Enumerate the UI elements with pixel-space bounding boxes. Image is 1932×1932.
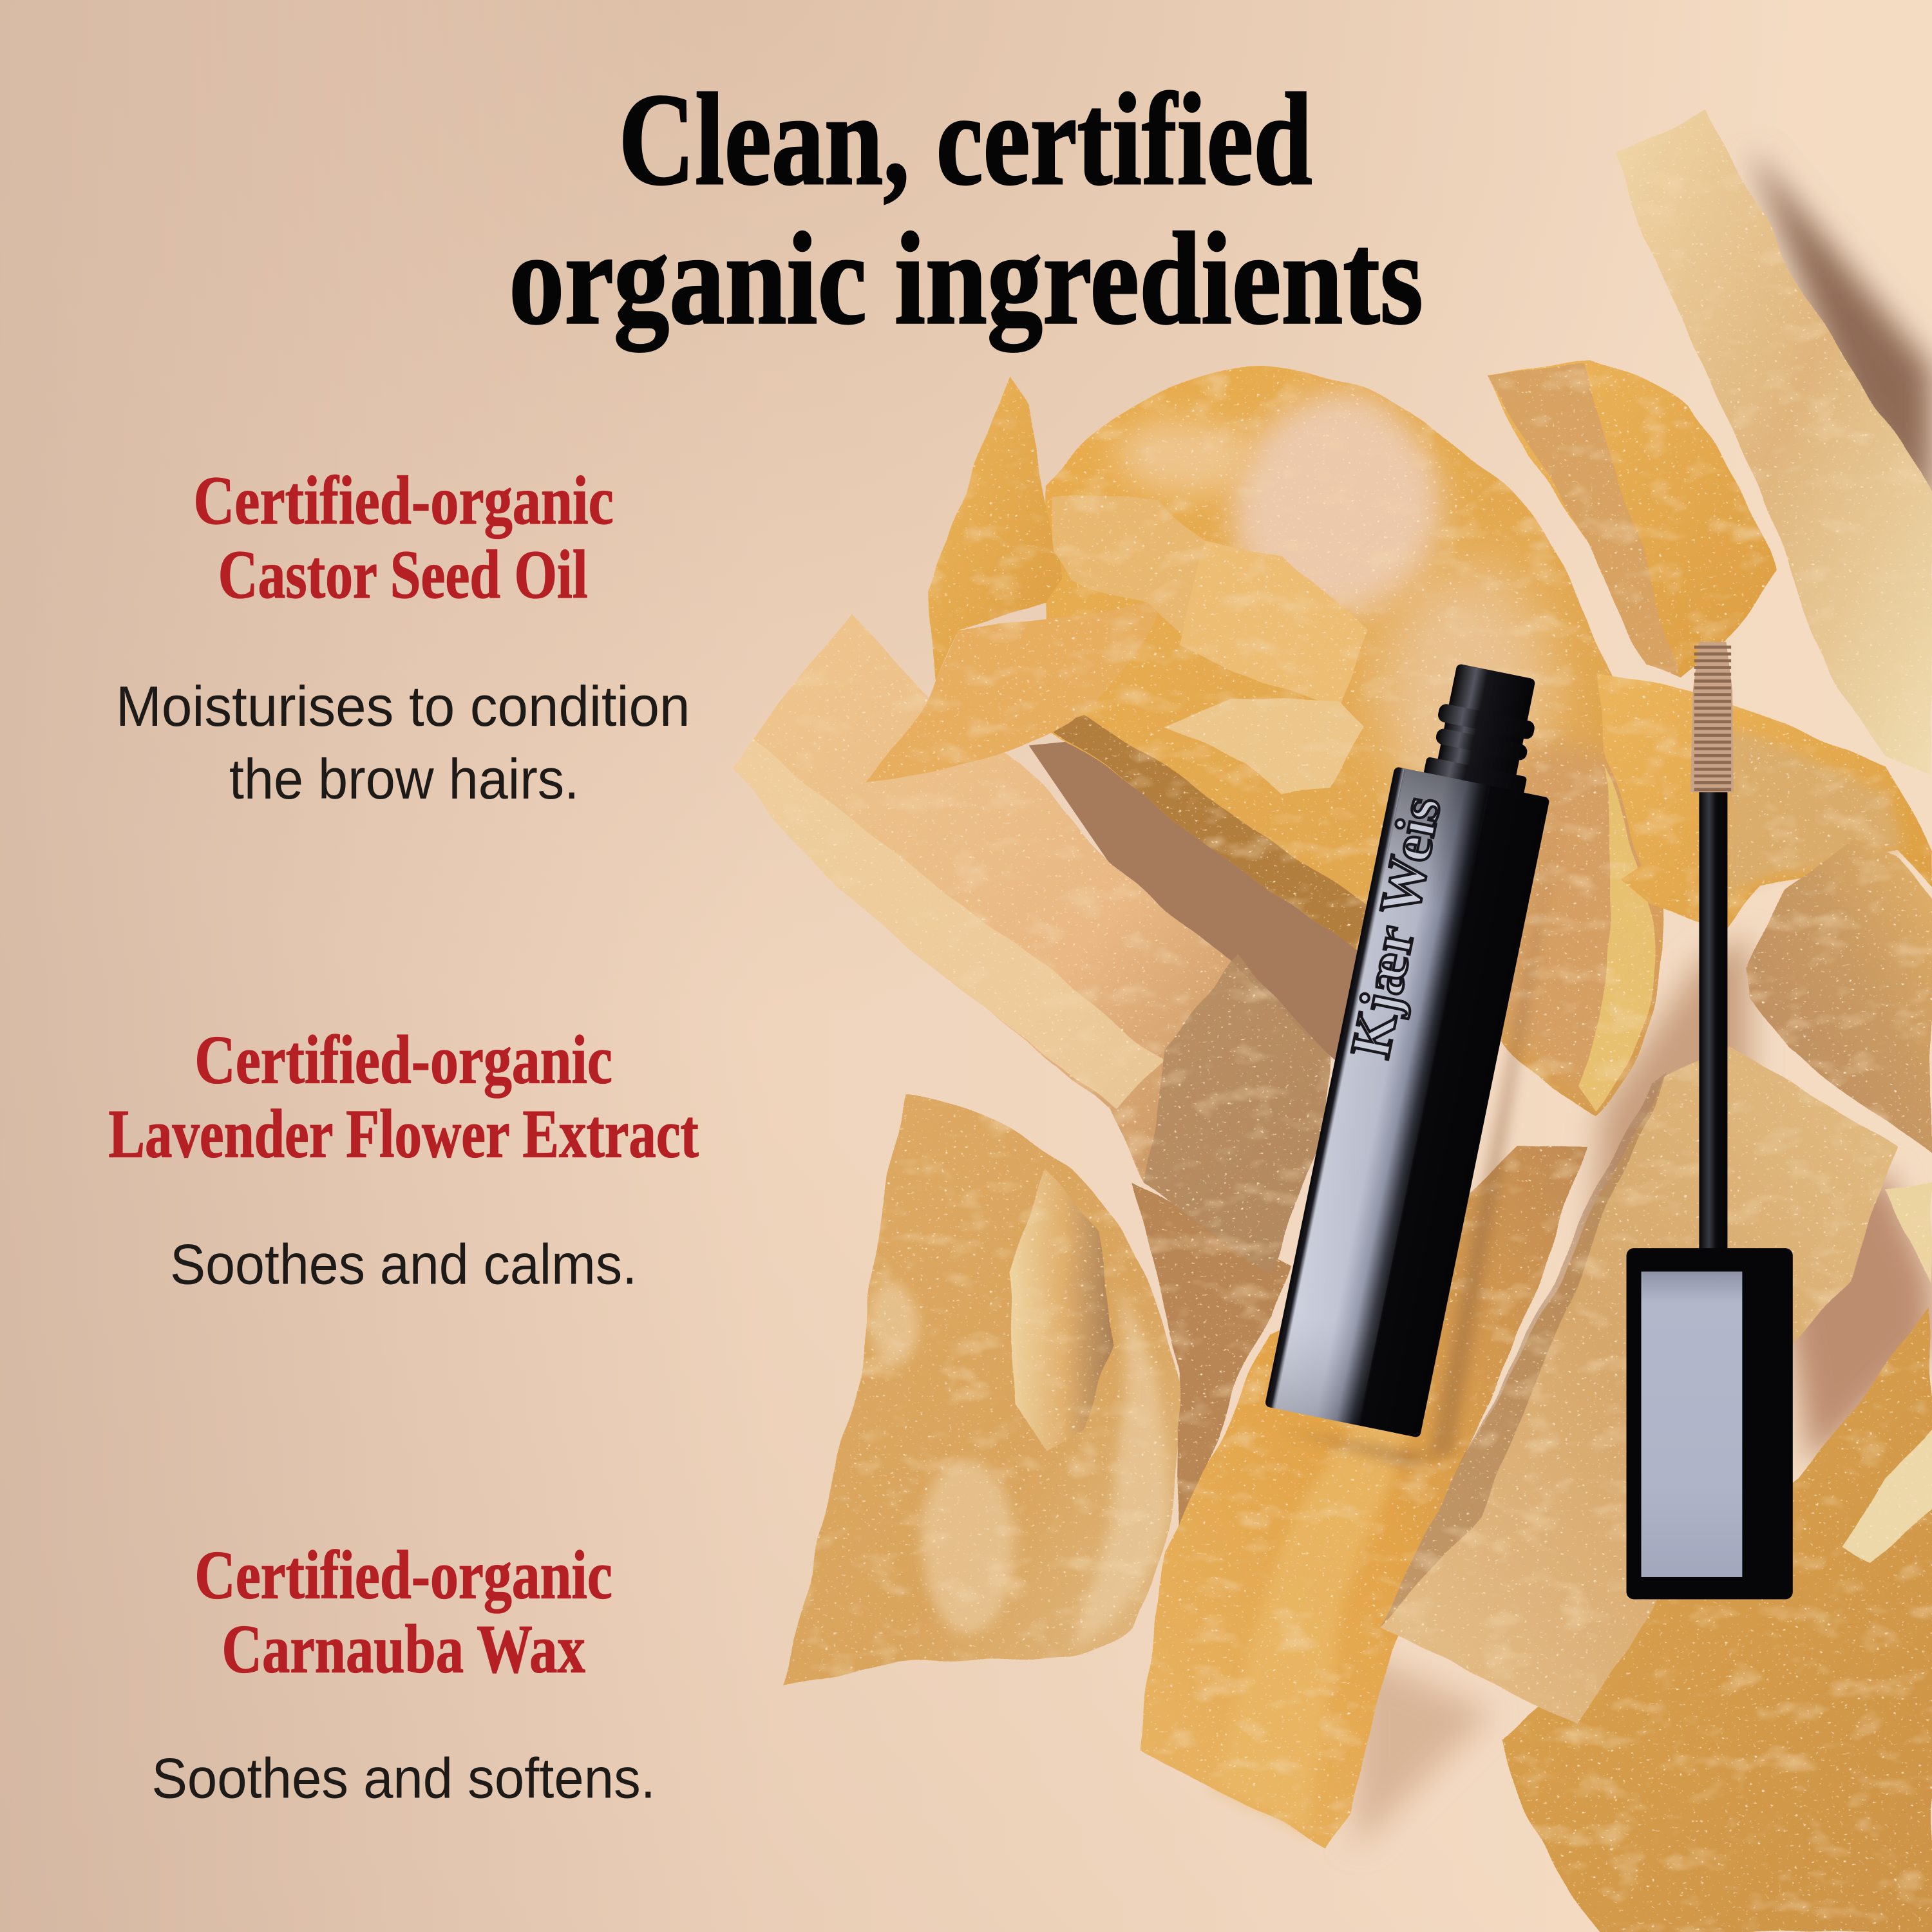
heading	[194, 1538, 612, 1687]
ingredient: castor seed oil	[116, 463, 690, 811]
tube neck	[1423, 661, 1547, 796]
wax: top right pale strip	[1614, 111, 1932, 774]
wax: right slab frost	[1725, 727, 1904, 900]
wax: flake lower	[1164, 696, 1365, 795]
heading: Castor Seed Oil	[218, 537, 588, 613]
wax: strip highlight	[1214, 1356, 1417, 1836]
description	[116, 674, 690, 811]
wax: curved flake	[866, 601, 1158, 782]
wax: disc frost	[869, 1282, 1168, 1651]
wax: strip brown end	[1146, 955, 1331, 1271]
heading: Certified-organic	[194, 1538, 612, 1614]
wax: strip shadow seam	[1378, 1074, 1666, 1627]
shadow: under centre pile	[1029, 739, 1361, 1072]
ingredient: lavender flower extract	[108, 1023, 699, 1296]
brush	[1690, 642, 1734, 792]
heading: Certified-organic	[194, 1023, 612, 1099]
wax: flake upper	[1054, 495, 1205, 641]
wax: small flake on disc	[1008, 1171, 1113, 1452]
wax: brown piece behind tube	[1133, 1183, 1287, 1553]
shadow: bottom centre strip	[1356, 1651, 1491, 1848]
heading: Lavender Flower Extract	[108, 1097, 699, 1173]
description: Soothes and calms.	[170, 1233, 637, 1296]
cap	[1627, 1248, 1793, 1599]
wax: right slab under brush	[1598, 672, 1932, 931]
ingredient: carnauba wax	[151, 1538, 656, 1810]
description: Moisturises to condition	[116, 674, 690, 738]
wax: diagonal right strip	[1378, 1047, 1897, 1725]
wax: bottom right disc	[1503, 1306, 1932, 1932]
logo: Kjær Weis	[1339, 791, 1454, 1063]
heading	[108, 1023, 699, 1173]
title: organic ingredients	[509, 206, 1423, 352]
shadow: right of cap	[1774, 1171, 1932, 1466]
tube shading	[1274, 768, 1489, 1425]
shadow: top right strip	[1750, 148, 1932, 518]
wax: tall flake	[931, 376, 1062, 680]
mascara wand	[1627, 642, 1793, 1599]
heading	[193, 463, 614, 613]
wax: bottom left half disc	[785, 1097, 1180, 1685]
wax: flake block	[1177, 542, 1368, 708]
wax: slab stripe	[1484, 363, 1678, 680]
tube shadow	[1282, 813, 1558, 1466]
title: Clean, certified	[618, 67, 1312, 213]
wax pieces	[730, 111, 1932, 1932]
wax: upper middle slab	[1484, 360, 1777, 680]
description: the brow hairs.	[229, 747, 579, 811]
title	[509, 67, 1423, 352]
wax: bottom centre strip	[1140, 1146, 1589, 1848]
wax: pale flake, right edge	[1885, 1180, 1932, 1282]
mascara tube	[1265, 656, 1573, 1438]
description: Soothes and softens.	[151, 1746, 656, 1810]
wax: right chunk	[1747, 840, 1932, 1152]
heading: Certified-organic	[193, 463, 614, 539]
wax: pale flake, lower right	[1844, 1429, 1932, 1562]
tube body	[1265, 766, 1550, 1438]
wax: large arched slab	[1047, 369, 1663, 1114]
wax: arch frosting	[1047, 394, 1663, 1109]
cast shadows	[1029, 148, 1932, 1848]
rod	[1699, 792, 1727, 1251]
shadow: right of arch	[1589, 936, 1750, 1282]
wax: strip pale edge	[730, 739, 1164, 1109]
wax: long diagonal strip	[730, 616, 1331, 1271]
heading: Carnauba Wax	[222, 1611, 585, 1687]
